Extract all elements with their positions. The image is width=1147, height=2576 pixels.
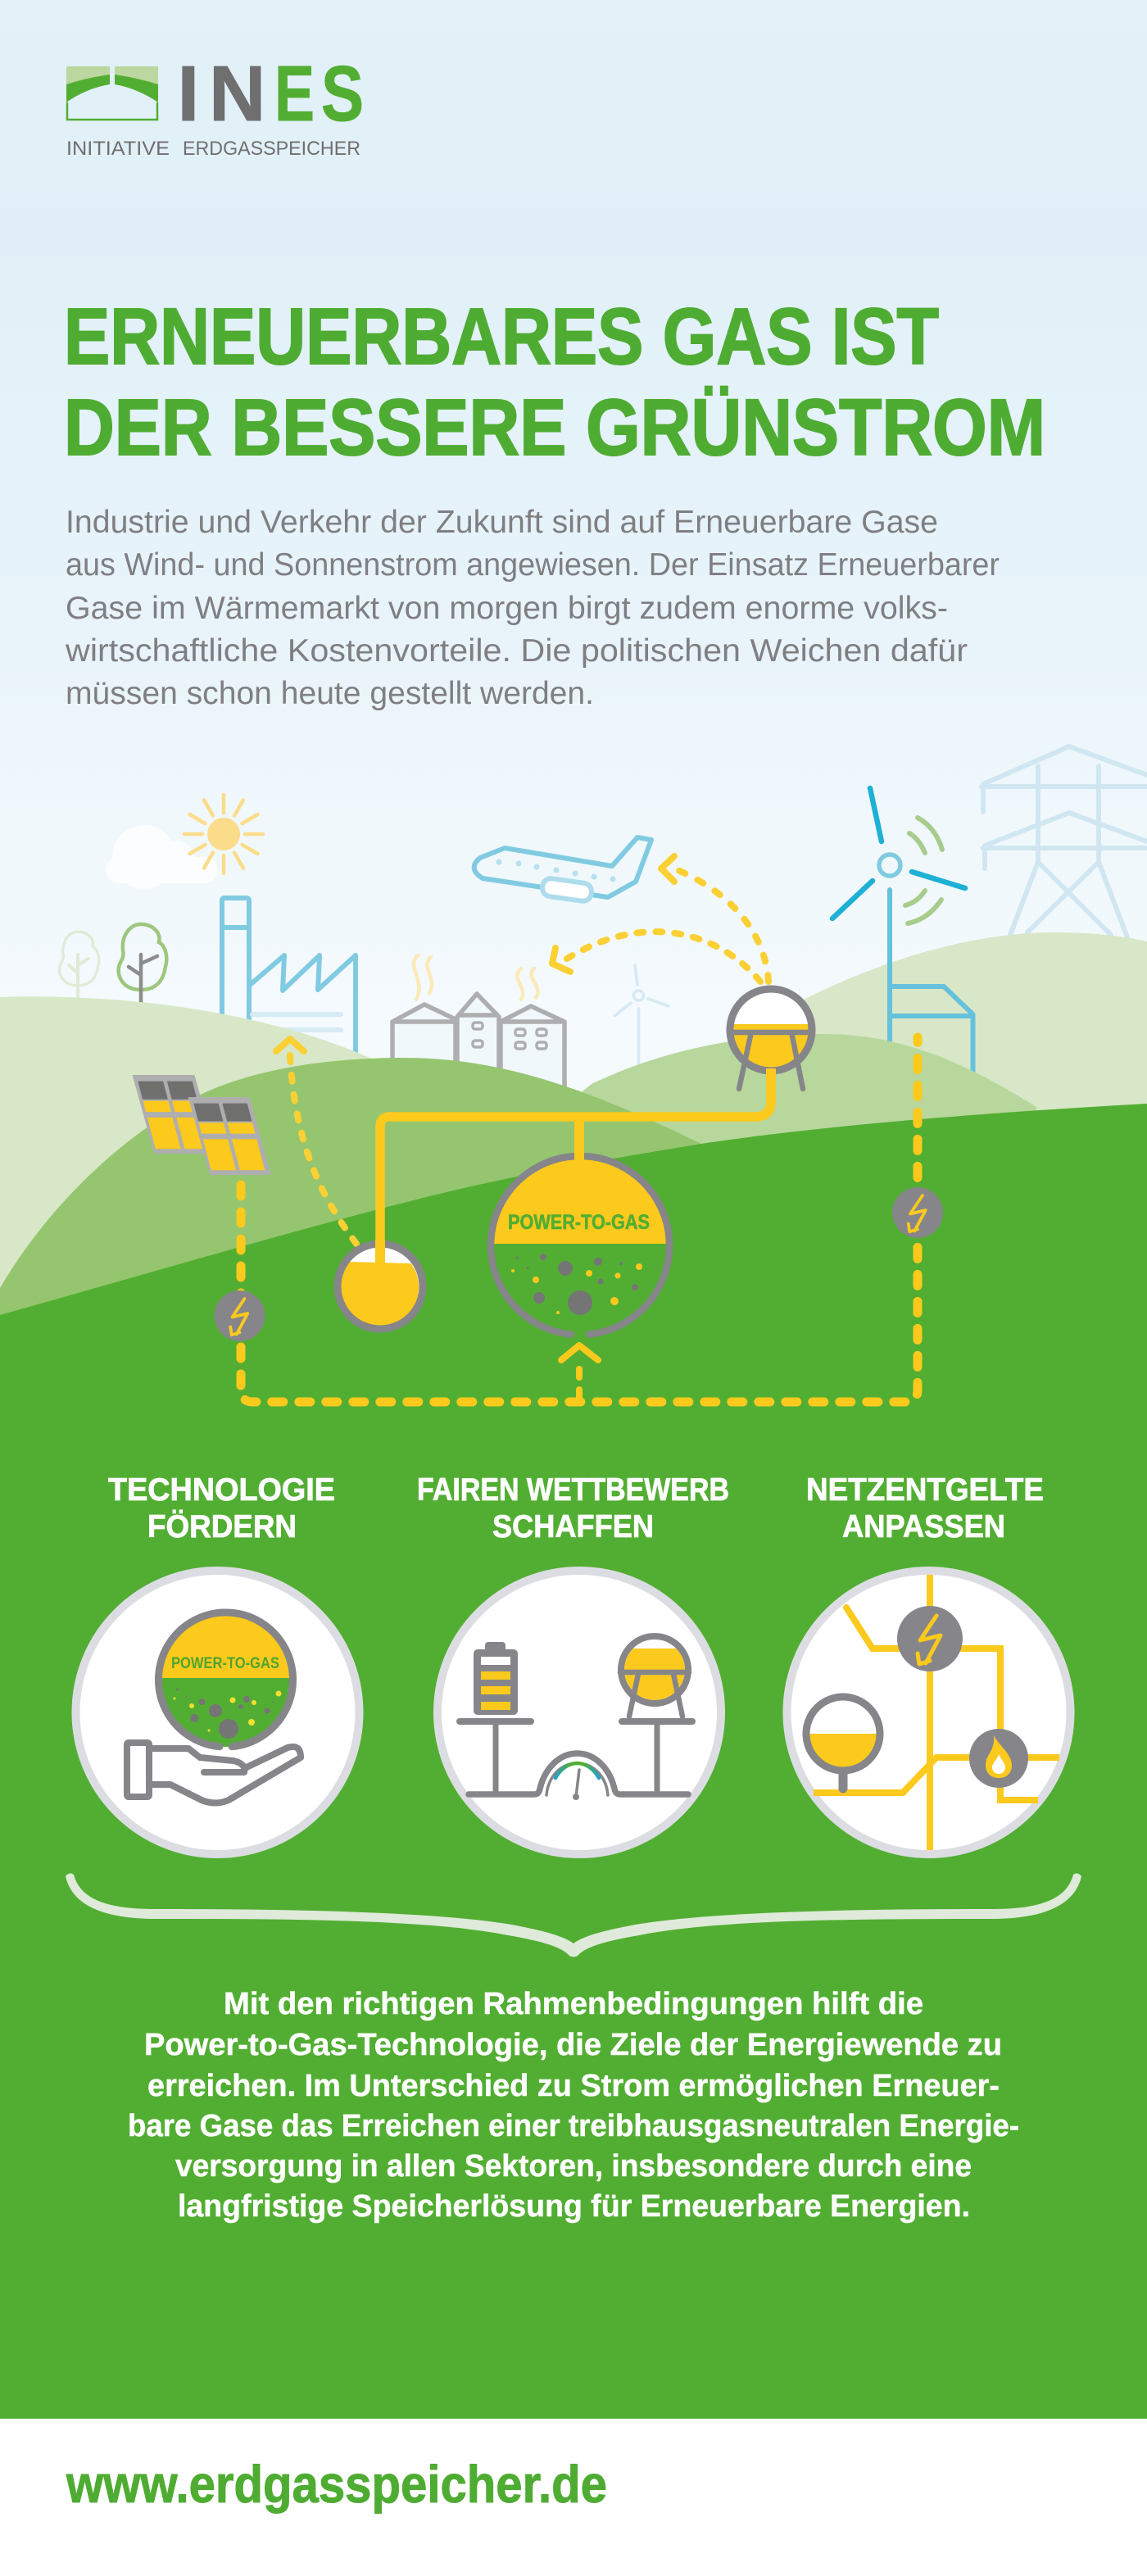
panel: fair competition circle [437, 1571, 721, 1854]
heading: Netzentgelte anpassen [806, 1472, 1044, 1544]
icon: electricity node right [892, 1187, 943, 1238]
icon: factory [222, 898, 356, 1057]
icon: tree [119, 924, 166, 1010]
icon: electricity node [897, 1606, 963, 1671]
dashed arrow: tank to factory [276, 1039, 356, 1244]
title: DER BESSERE GRÜNSTROM [64, 383, 1045, 472]
gas bubbles [511, 1254, 642, 1315]
icon: plane [474, 837, 651, 902]
icon: storage tank [806, 1697, 880, 1789]
logo icon: storage dome [66, 66, 158, 120]
conclusion text block: versorgung in allen Sektoren, insbesondere durch eine [175, 2149, 972, 2184]
logo subtitle: ERDGASSPEICHER [183, 138, 360, 160]
medium left hill [0, 1058, 701, 1327]
icon: power-to-gas sphere: POWER-TO-GAS [171, 1654, 279, 1672]
logo: INES Initiative Erdgasspeicher [66, 50, 364, 160]
solar panel back [133, 1075, 216, 1154]
right middle hill [492, 1034, 1036, 1172]
icon: large wind turbine [832, 788, 973, 1082]
heading: Fairen Wettbewerb schaffen [417, 1472, 729, 1544]
gas pipe network [380, 1070, 771, 1266]
intro text block: aus Wind- und Sonnenstrom angewiesen. Der Einsatz Erneuerbarer [66, 547, 1000, 583]
network lines [814, 1575, 1059, 1850]
conclusion text block: bare Gase das Erreichen einer treibhausgasneutralen Energie- [128, 2109, 1019, 2143]
icon: storage tank with legs [730, 989, 812, 1089]
intro text block: wirtschaftliche Kostenvorteile. Die politischen Weichen dafür [65, 633, 968, 669]
icon: solar panels [133, 1075, 271, 1175]
heading: Fairen Wettbewerb schaffen: FAIREN WETTBEWERB [417, 1472, 729, 1508]
heading: Netzentgelte anpassen: NETZENTGELTE [806, 1472, 1044, 1508]
intro text block: Gase im Wärmemarkt von morgen birgt zudem enorme volks- [66, 591, 948, 626]
tank label: POWER-TO-GAS [508, 1211, 650, 1234]
heading: Netzentgelte anpassen: ANPASSEN [842, 1509, 1005, 1544]
logo wordmark: N [209, 50, 265, 138]
conclusion text block: Mit den richtigen Rahmenbedingungen hilft die [224, 1987, 923, 2021]
logo subtitle: INITIATIVE [66, 138, 170, 160]
dashed arrow: tank to houses [552, 932, 760, 982]
conclusion text block: erreichen. Im Unterschied zu Strom ermöglichen Erneuer- [147, 2069, 1000, 2103]
solar panel front [188, 1097, 271, 1175]
conclusion text block: langfristige Speicherlösung für Erneuerbare Energien. [178, 2189, 970, 2224]
curly brace [66, 1873, 1081, 1957]
logo wordmark: S [321, 50, 364, 138]
title [64, 292, 1045, 472]
front green field [0, 1104, 1147, 2419]
dashed arrow: tank to plane [661, 856, 768, 982]
icon: scale and gauge [460, 1721, 692, 1800]
dashed electricity line [241, 1037, 918, 1402]
left light hill [0, 996, 377, 1327]
icon: open hand [127, 1743, 301, 1803]
logo wordmark: I [177, 50, 199, 138]
icon: pale tree [60, 932, 99, 998]
icon: power-to-gas sphere [158, 1612, 293, 1747]
conclusion text block [128, 1987, 1019, 2224]
logo wordmark: E [274, 50, 315, 138]
far right hill [804, 932, 1147, 1163]
heading: Technologie fördern: TECHNOLOGIE [108, 1472, 335, 1508]
power-to-gas main tank [491, 1117, 669, 1334]
intro text block: müssen schon heute gestellt werden. [66, 676, 594, 711]
icon: electricity node left [215, 1290, 265, 1341]
icon: battery [474, 1642, 518, 1715]
heading: Technologie fördern: FÖRDERN [147, 1509, 297, 1544]
icon: steam [414, 955, 538, 1000]
icon: small sphere tank [338, 1240, 423, 1329]
heading: Technologie fördern [108, 1472, 335, 1544]
intro text block [65, 505, 1000, 711]
conclusion text block: Power-to-Gas-Technologie, die Ziele der Energiewende zu [144, 2028, 1002, 2062]
sky background [0, 0, 1147, 1327]
logo wordmark [177, 50, 364, 138]
footer website url: www.erdgasspeicher.de [66, 2455, 607, 2514]
panel: grid fees circle [787, 1571, 1070, 1854]
icon: gas flame node [969, 1729, 1028, 1788]
icon: houses [392, 955, 564, 1090]
intro text block: Industrie und Verkehr der Zukunft sind auf Erneuerbare Gase [66, 505, 938, 540]
icon: cloud [106, 825, 218, 889]
icon: tank on scale [620, 1636, 689, 1717]
heading: Fairen Wettbewerb schaffen: SCHAFFEN [492, 1509, 654, 1544]
icon: sun [184, 795, 263, 873]
title: ERNEUERBARES GAS IST [64, 292, 939, 381]
icon: small pale wind turbine [614, 965, 669, 1065]
logo subtitle [66, 138, 360, 160]
footer band [0, 2419, 1147, 2576]
panel: technology circle [75, 1571, 359, 1854]
icon: power pylon [982, 746, 1147, 937]
dashed arrow: up into power-to-gas [561, 1345, 598, 1398]
